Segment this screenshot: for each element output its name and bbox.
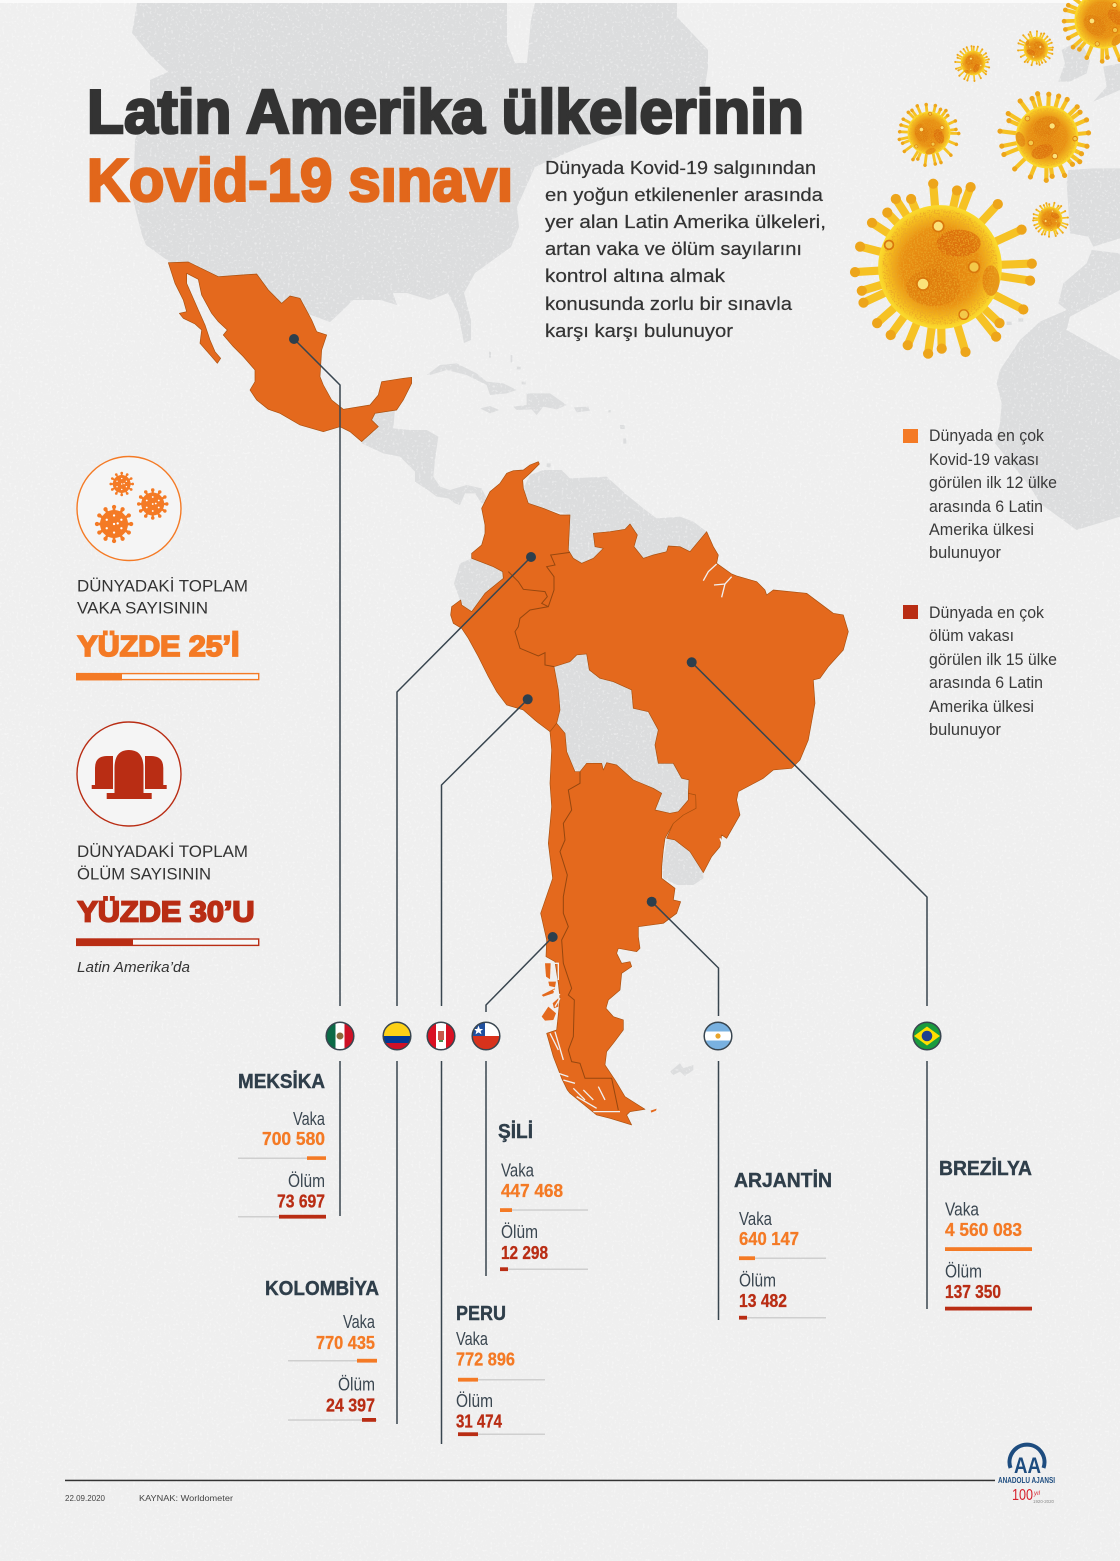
data: Kolombiya: 24 397 (326, 1396, 375, 1416)
data: Meksika: Ölüm (288, 1171, 325, 1191)
data: Peru (456, 1303, 545, 1436)
label: VAKA SAYISININ (77, 598, 208, 618)
data: Şili: 12 298 (501, 1243, 548, 1263)
Bolivia and Paraguay (554, 654, 689, 813)
logo: Anadolu Ajansı: 1920-2020 (1033, 1499, 1054, 1504)
national borders (508, 552, 618, 1110)
label: ÖLÜM SAYISININ (77, 864, 211, 884)
West Africa (995, 250, 1120, 530)
panel: world cases share (76, 456, 259, 680)
Venezuela and Guianas (523, 470, 707, 563)
title line 2: Kovid-19 sınavı (87, 147, 513, 214)
intro text: en yoğun etkilenenler arasında (545, 185, 824, 205)
intro text: artan vaka ve ölüm sayılarını (545, 239, 802, 259)
data: Meksika (238, 1070, 326, 1219)
data: Brezilya: BREZİLYA (939, 1157, 1032, 1180)
big number: YÜZDE 25’İ (78, 630, 240, 663)
Ecuador (454, 558, 503, 612)
flag: Brazil (913, 1022, 941, 1050)
Caribbean islands (427, 352, 626, 467)
data: Brezilya (939, 1157, 1032, 1310)
data: Peru: PERU (456, 1303, 506, 1325)
data: Şili: Ölüm (501, 1222, 538, 1242)
data: Kolombiya: Ölüm (338, 1374, 375, 1394)
date: 22.09.2020 (65, 1493, 105, 1503)
Colombia, Peru and Brazil (451, 462, 848, 873)
title line 1: Latin Amerika ülkelerinin (87, 78, 804, 147)
data: Arjantin: 640 147 (739, 1229, 799, 1249)
progress bar (76, 673, 259, 680)
legend text: ölüm vakası (929, 627, 1014, 645)
data: Kolombiya: Vaka (343, 1312, 376, 1332)
data: Meksika: 700 580 (262, 1129, 325, 1149)
Falkland Islands (670, 1063, 693, 1076)
flag: Colombia (383, 1022, 411, 1050)
legend: cases (903, 427, 1057, 562)
logo: Anadolu Ajansı (998, 1445, 1055, 1504)
data: Peru: 772 896 (456, 1350, 515, 1370)
legend text: bulunuyor (929, 544, 1001, 562)
data: Arjantin: 13 482 (739, 1291, 787, 1311)
data: Şili (498, 1120, 588, 1271)
orange marker (903, 429, 918, 443)
data: Peru: Ölüm (456, 1391, 493, 1411)
Iberia (1067, 168, 1120, 247)
icon: tombstones in circle (77, 722, 181, 826)
title (87, 78, 804, 214)
data: Kolombiya: 770 435 (316, 1333, 375, 1353)
legend text: Amerika ülkesi (929, 698, 1034, 716)
flag: Argentina (704, 1022, 732, 1050)
legend text: görülen ilk 12 ülke (929, 474, 1057, 492)
flag: Chile (472, 1022, 500, 1050)
data: Brezilya: 4 560 083 (945, 1220, 1022, 1240)
data: Meksika: Vaka (293, 1109, 326, 1129)
intro text: yer alan Latin Amerika ülkeleri, (545, 212, 826, 232)
Central America (362, 408, 488, 505)
data: Arjantin (734, 1169, 832, 1320)
data: Peru: Vaka (456, 1329, 489, 1349)
label: DÜNYADAKİ TOPLAM (77, 842, 248, 861)
progress bar (76, 938, 259, 946)
data: Kolombiya: KOLOMBİYA (265, 1277, 379, 1300)
icon: viruses in circle (77, 456, 181, 560)
red marker (903, 605, 918, 619)
background world map (132, 3, 1120, 1076)
intro text: karşı karşı bulunuyor (545, 321, 733, 341)
label (77, 576, 248, 618)
legend text (929, 427, 1057, 562)
logo: Anadolu Ajansı: 100 (1012, 1487, 1033, 1504)
legend text: arasında 6 Latin (929, 498, 1043, 516)
North America landmass (132, 3, 708, 343)
map: highlighted Latin American countries (168, 262, 848, 1125)
southern Chile islands (542, 963, 657, 1113)
flag: Peru (427, 1022, 455, 1050)
panel: world deaths share (76, 722, 259, 976)
data: Kolombiya (265, 1277, 379, 1422)
legend text: Kovid-19 vakası (929, 451, 1039, 469)
data: Brezilya: Vaka (945, 1200, 980, 1220)
intro text (545, 158, 826, 341)
label (77, 842, 248, 884)
data: Şili: Vaka (501, 1160, 535, 1180)
leader lines (294, 339, 927, 1444)
label: DÜNYADAKİ TOPLAM (77, 576, 248, 596)
data: Meksika: 73 697 (277, 1192, 325, 1212)
data: Şili: ŞİLİ (498, 1120, 533, 1143)
map location dots (289, 334, 697, 942)
legend text: Dünyada en çok (929, 427, 1045, 445)
data: Meksika: MEKSİKA (238, 1070, 325, 1093)
data: Arjantin: Vaka (739, 1209, 773, 1229)
intro text: Dünyada Kovid-19 salgınından (545, 158, 816, 178)
logo: Anadolu Ajansı: ANADOLU AJANSI (998, 1475, 1055, 1485)
data: Arjantin: ARJANTİN (734, 1169, 832, 1192)
legend text (929, 604, 1057, 739)
map water details (550, 564, 732, 1112)
legend text: Dünyada en çok (929, 604, 1045, 622)
Mexico (168, 262, 412, 442)
Chile and Argentina (541, 723, 696, 1125)
footer (65, 1480, 995, 1503)
logo: Anadolu Ajansı: yıl (1033, 1491, 1041, 1497)
legend text: Amerika ülkesi (929, 521, 1034, 539)
flag: Mexico (326, 1022, 354, 1050)
data: Arjantin: Ölüm (739, 1270, 776, 1290)
legend: deaths (903, 604, 1057, 739)
source: KAYNAK: Worldometer (139, 1493, 233, 1503)
big number: YÜZDE 30’U (78, 896, 254, 928)
intro text: konusunda zorlu bir sınavla (545, 294, 793, 314)
legend text: görülen ilk 15 ülke (929, 651, 1057, 669)
Ireland and Britain (1058, 40, 1120, 102)
coronavirus illustrations (855, 0, 1120, 354)
Uruguay (662, 838, 703, 885)
legend text: arasında 6 Latin (929, 674, 1043, 692)
data: Peru: 31 474 (456, 1412, 502, 1432)
intro text: kontrol altına almak (545, 266, 726, 286)
data: Şili: 447 468 (501, 1181, 563, 1201)
note: Latin Amerika’da (77, 959, 190, 976)
legend text: bulunuyor (929, 721, 1001, 739)
data: Brezilya: Ölüm (945, 1262, 982, 1282)
logo: Anadolu Ajansı: AA (1014, 1453, 1041, 1478)
data: Brezilya: 137 350 (945, 1282, 1001, 1302)
